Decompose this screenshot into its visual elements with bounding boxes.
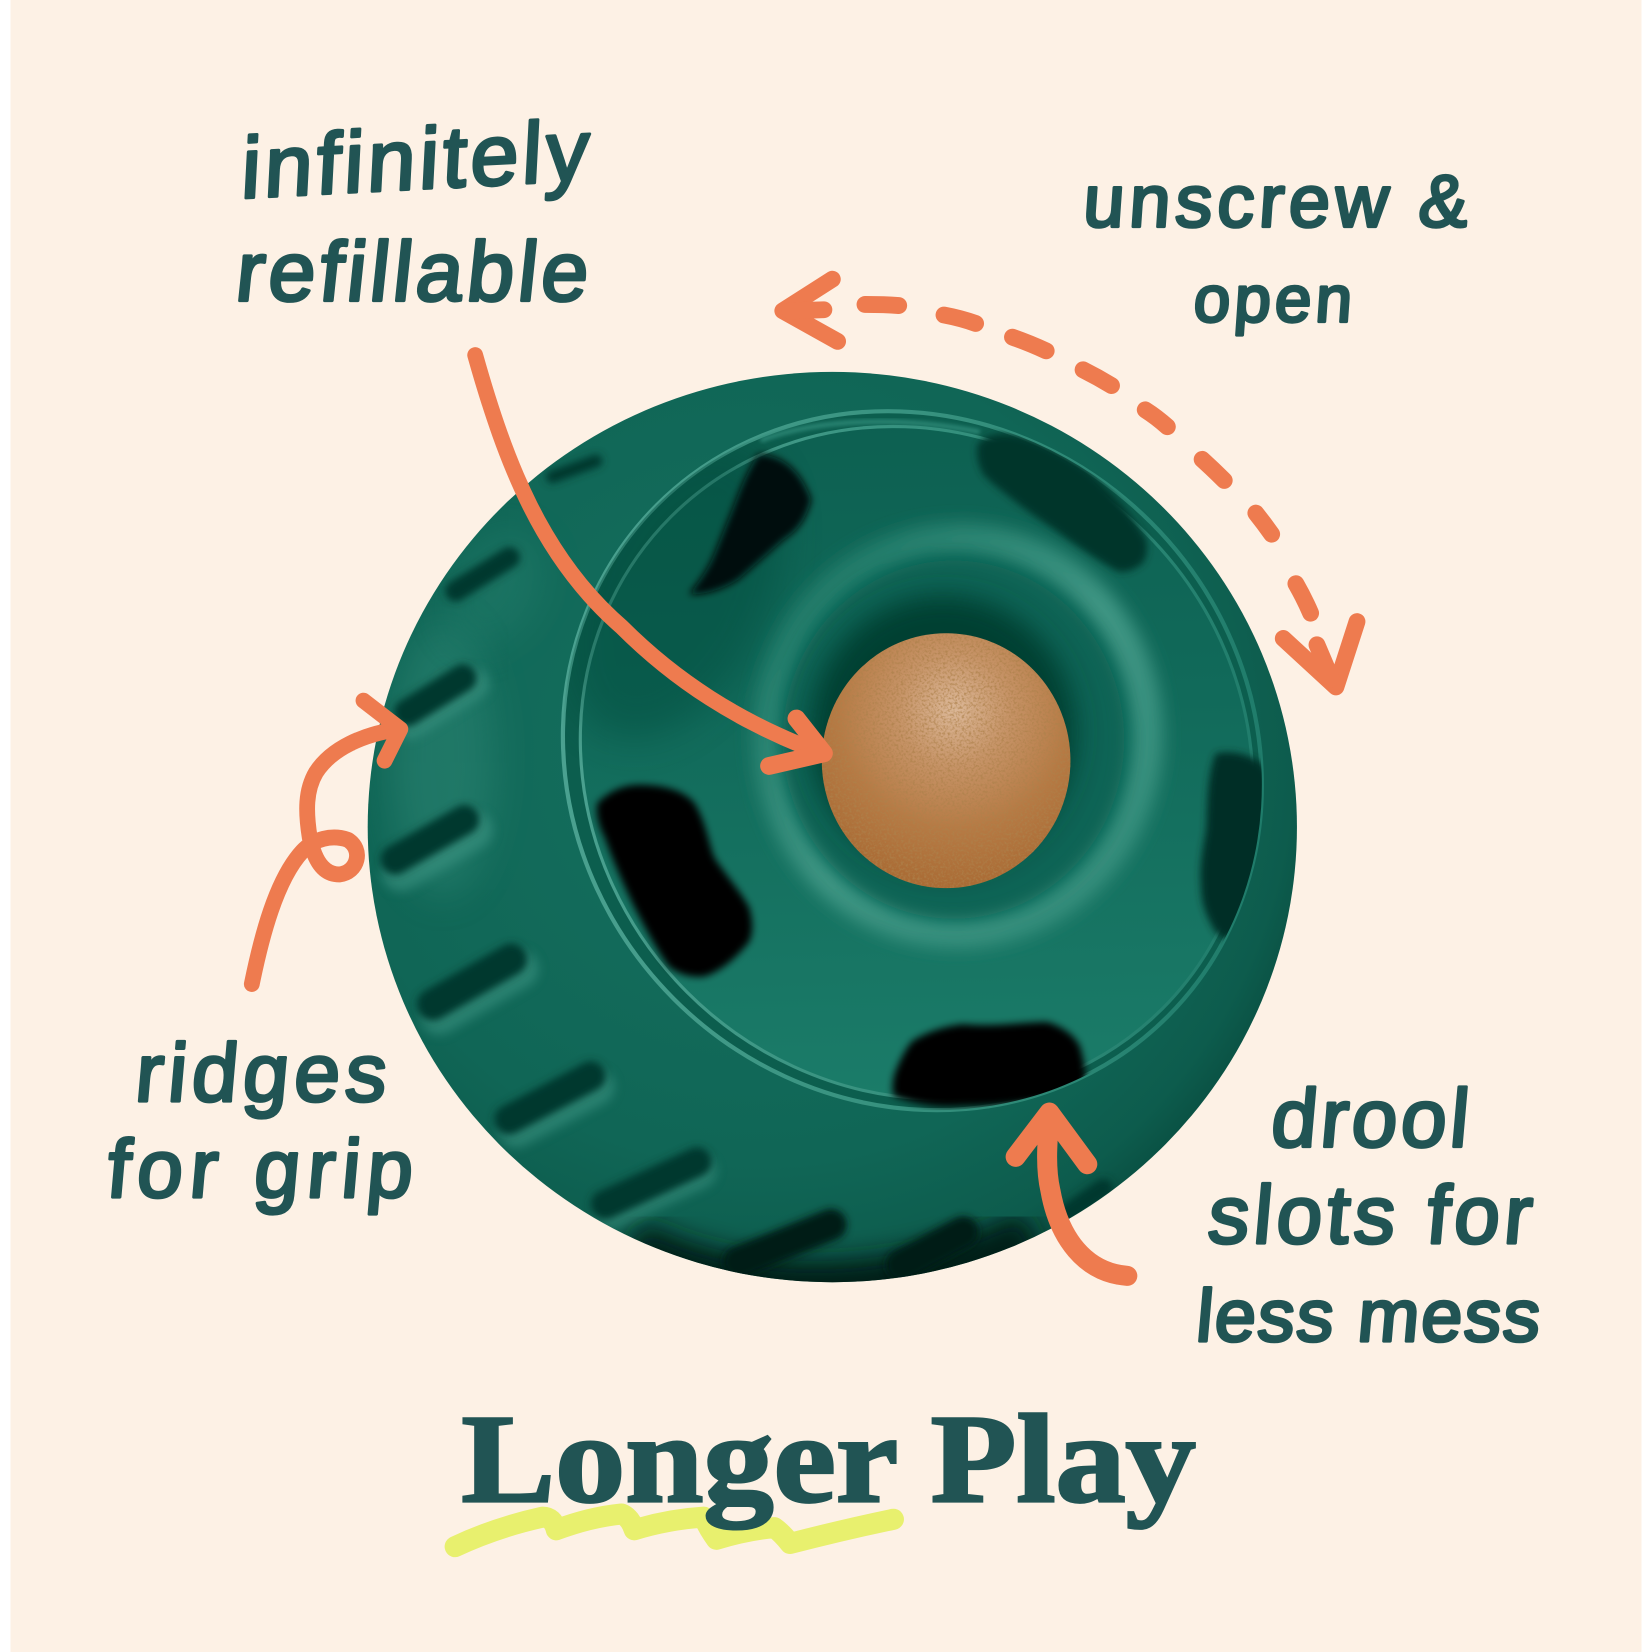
- label: unscrew and open: [1081, 160, 1471, 335]
- arrow: drool slots: [1016, 1113, 1127, 1276]
- lighter lip top: [761, 422, 980, 440]
- label: ridges for grip: [104, 1027, 417, 1215]
- arrow: unscrew and open: [783, 279, 1357, 687]
- slot: bottom: [893, 1022, 1086, 1107]
- line: open: open: [1192, 262, 1355, 335]
- line: infinitely: infinitely: [239, 103, 592, 217]
- well: [783, 560, 1124, 919]
- slot: right: [1196, 748, 1262, 943]
- torus highlight: [768, 538, 1147, 932]
- treat ball: [822, 633, 1070, 888]
- ball outer body: [368, 372, 1297, 1282]
- slot: top right: [977, 434, 1147, 572]
- line: refillable: refillable: [232, 223, 594, 318]
- label: drool slots for less mess: [1193, 1072, 1544, 1357]
- line: unscrew &: unscrew &: [1081, 160, 1471, 242]
- arrow: infinitely refillable: [475, 355, 824, 766]
- grip ridges: [375, 453, 1117, 1286]
- cap face: [441, 287, 1392, 1238]
- well top shadow: [810, 595, 1076, 869]
- line: ridges: ridges: [132, 1027, 391, 1119]
- arrow: ridges for grip: [252, 701, 400, 984]
- label: infinitely refillable: [232, 103, 594, 318]
- shaded recess top left: [564, 439, 776, 734]
- title: Longer Play: [461, 1389, 1196, 1529]
- line: slots for: slots for: [1205, 1169, 1536, 1261]
- line: drool: drool: [1268, 1072, 1473, 1164]
- central donut well: [768, 538, 1147, 932]
- screw cap rim: [418, 267, 1406, 1255]
- slots: [522, 407, 1282, 1107]
- line: less mess: less mess: [1193, 1274, 1544, 1357]
- yellow squiggle underline: [455, 1514, 893, 1547]
- slot: top left: [689, 454, 811, 594]
- product: green treat ball toy: [368, 372, 1297, 1282]
- slot: left: [597, 785, 752, 977]
- line: for grip: for grip: [104, 1123, 417, 1215]
